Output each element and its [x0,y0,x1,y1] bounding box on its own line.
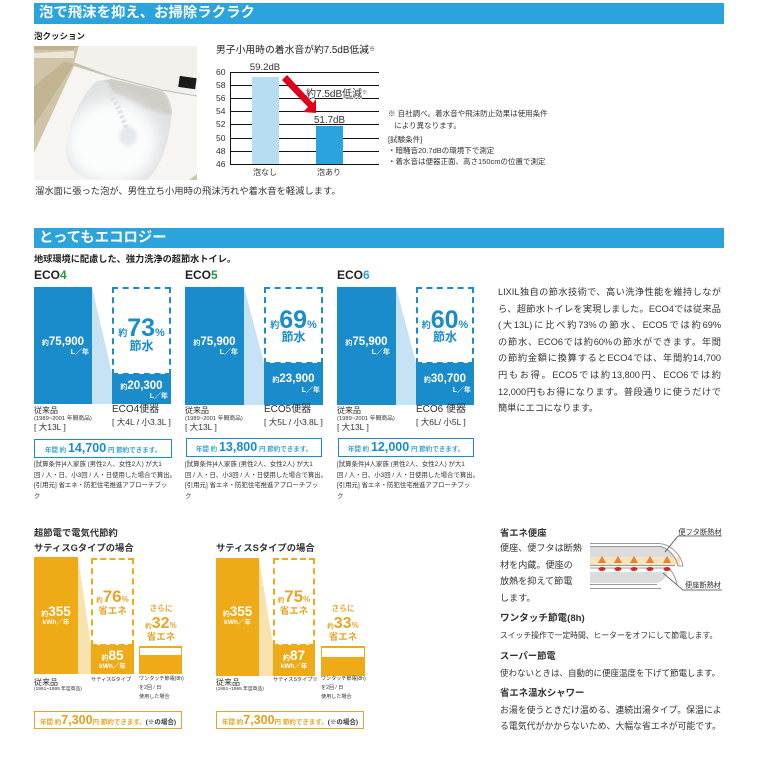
ECO5 panel: 約75,900 [193,336,236,348]
energy panel: type S: ワンタッチ節電(8h) [321,676,366,682]
ecology lead text: 地球環境に配慮した、強力洗浄の超節水トイレ。 [34,254,236,264]
electricity saving heading [34,528,134,553]
bar chart: noise reduction: 48 [216,146,226,156]
footnote and test conditions [388,109,548,130]
warm water shower text: 省エネ温水シャワー [500,687,584,698]
arrow: reduction [282,75,316,113]
energy panel: type S: 使用した場合 [321,694,352,700]
ECO5 panel: 約23,900 [272,373,315,385]
energy panel: type G: を2回 / 日 [139,685,161,691]
LIXIL water saving paragraph: 簡単にエコになります。 [498,403,598,413]
diagram: seat insulation: 便フタ断熱材 [678,528,722,536]
bar chart: noise reduction: ※ [362,90,367,96]
seat description: 材を内蔵。便座の [500,560,573,570]
energy panel: type S: を2回 / 日 [321,685,343,691]
bar chart: noise reduction: 約7.5dB低減 [306,89,362,100]
energy panel: type S: 約75% [278,587,310,606]
ECO5 panel: (1989~2001 年間商品) [185,416,243,422]
energy panel: type G: 約355 [41,604,71,619]
ECO5 panel: ク [185,493,191,500]
ECO5 panel: L／年 [220,349,238,356]
energy panel: type G: ワンタッチ節電(8h) [139,676,184,682]
energy panel: type G: 約76% [96,587,129,606]
ECO6 panel: 節水 [433,330,457,344]
bar chart: noise reduction: 50 [216,133,226,143]
warm water shower description: る電気代がかからないため、大幅な省エネが可能です。 [500,721,721,731]
energy panel: type G: サティスGタイプ [91,677,131,683]
ECO6 panel: ECO6 便器 [416,404,466,415]
ECO4 panel: ク [34,493,40,500]
bar chart: noise reduction: 60 [216,67,226,77]
energy panel: type S: 年間 約7,300円 節約できます。(※の場合) [222,713,358,727]
ECO6 panel: (1989~2001 年間商品) [337,416,395,422]
energy panel: type G: 年間 約7,300円 節約できます。(※の場合) [40,713,176,727]
ECO4 panel: L／年 [150,393,168,400]
photo: toilet bowl with foam [34,46,197,180]
super saving description: 使わないときは、自動的に便座温度を下げて節電します。 [500,668,720,678]
heading banner: foam [34,3,724,24]
warm water shower description: お湯を使うときだけ温める、連続出湯タイプ。保温によ [500,705,722,715]
ECO4 panel: 約73% [118,314,165,342]
ECO6 panel: 回 / 人・日、小3回 / 人・日使用した場合で算出。 [337,472,479,479]
ECO6 panel: [ 大6L/ 小5L ] [416,417,466,427]
foam description: 溜水面に張った泡が、男性立ち小用時の飛沫汚れや着水音を軽減します。 [35,186,341,196]
ECO5 panel: 回 / 人・日、小3回 / 人・日使用した場合で算出。 [185,472,327,479]
LIXIL water saving paragraph: 12,000円もお得になります。普段通りに使うだけで [498,387,721,397]
ECO5 panel: [引用元] 省エネ・防犯住宅推進アプローチブッ [185,482,318,489]
bar chart: noise reduction: 泡あり [317,167,341,177]
energy panel: type G: 従来品 [34,678,58,687]
test conditions: [試験条件] [388,135,422,144]
chart title: 男子小用時の着水音が約7.5dB低減※ [216,45,375,56]
energy panel: type G: kWh／年 [43,619,69,626]
ECO6 panel: L／年 [453,387,471,394]
ECO5 panel: 従来品 [185,406,209,415]
test conditions [388,135,546,166]
ECO4 panel: 従来品 [34,406,58,415]
ECO4 panel [34,268,176,500]
ECO5 panel: 約69% [270,306,317,334]
one-touch saving text: ワンタッチ節電(8h) [500,613,585,624]
ECO6 panel: 約75,900 [345,336,388,348]
bar: with foam [316,126,343,164]
bar chart: noise reduction: 56 [216,93,226,103]
seat description: 放熱を抑えて節電 [500,576,572,586]
ECO4 panel: L／年 [71,349,89,356]
LIXIL water saving paragraph: の節約金額に換算するとECO4では、年間約14,700 [498,353,721,363]
bar chart: noise reduction [216,62,379,177]
ECO6 panel: 約60% [422,306,468,334]
type S heading: サティスSタイプの場合 [216,543,315,553]
energy panel: type G [34,557,184,729]
energy panel: type S: 省エネ [329,632,357,643]
ECO5 panel: ECO5便器 [264,404,311,415]
energy panel: type G: 約85 [101,648,124,663]
energy panel: type G: 約32% [145,615,177,632]
electricity saving heading: サティスGタイプの場合 [34,543,134,553]
super saving text: スーパー節電 [500,651,556,661]
energy panel: type G: (1991~1995 年度商品) [34,687,82,692]
energy panel: type S: 従来品 [216,678,240,687]
energy panel: type S: (1991~1995 年度商品) [216,687,264,692]
ECO5 panel: 年間 約 13,800 円 節約できます。 [196,440,312,454]
ECO6 panel: ECO6 [337,268,370,282]
subheading: foam cushion: 泡クッション [34,31,85,41]
energy panel: type G: 省エネ [98,606,127,617]
ECO6 panel: [試算条件]4人家族 (男性2人、女性2人) が大1 [337,461,465,468]
LIXIL water saving paragraph: の節水、ECO6では約60%の節水ができます。年間 [498,337,721,347]
heading banner: ecology [34,228,724,248]
bar chart: noise reduction: 59.2dB [250,62,280,73]
bar chart: noise reduction: 泡なし [253,167,277,177]
energy panel: type G: 省エネ [147,632,175,643]
ECO4 panel: [試算条件]4人家族 (男性2人、女性2人) が大1 [34,461,162,468]
ECO5 panel: ECO5 [185,268,218,282]
LIXIL water saving paragraph: (大13L)に比べ約73%の節水、ECO5では約69% [498,320,721,330]
energy panel: type S: 約87 [283,648,305,663]
energy panel: type G: さらに [149,604,173,613]
energy panel: type S [216,558,366,729]
ECO4 panel: ECO4 [34,268,67,282]
energy panel: type S: 約355 [223,604,252,619]
diagram: seat insulation: 便座断熱材 [685,580,721,590]
ECO4 panel: (1989~2001 年間商品) [34,416,92,422]
ECO4 panel: [ 大13L ] [34,422,66,432]
ECO4 panel: ECO4便器 [112,404,159,415]
energy-saving seat text: 省エネ便座 [500,528,546,538]
electricity saving heading: 超節電で電気代節約 [34,528,118,538]
seat description [500,543,582,602]
warm water shower description [500,705,722,731]
test conditions: ・暗騒音20.7dBの環境下で測定 [388,146,494,155]
ECO4 panel: 約20,300 [120,380,163,392]
energy panel: type G: kWh／年 [99,663,126,670]
ECO5 panel: [ 大5L / 小3.8L ] [264,417,323,427]
bar chart: noise reduction: 54 [216,106,226,116]
bar chart: noise reduction: 58 [216,80,226,90]
ECO4 panel: 年間 約 14,700 円 節約できます。 [45,441,161,455]
bar chart: noise reduction: 52 [216,119,226,129]
LIXIL water saving paragraph: LIXIL独自の節水技術で、高い洗浄性能を維持しなが [498,287,721,297]
bar chart: noise reduction: 51.7dB [314,115,345,126]
ECO4 panel: 約75,900 [42,336,84,348]
energy panel: type S: 約33% [327,615,359,632]
bar: without foam [252,77,279,164]
heading banner: ecology: とってもエコロジー [39,230,167,246]
energy panel: type S: 省エネ [280,606,308,617]
energy panel: type S: kWh／年 [281,663,307,670]
footnote and test conditions: ※ 自社調べ。着水音や飛沫防止効果は使用条件 [388,109,548,118]
energy panel: type G: 使用した場合 [139,694,170,700]
ECO6 panel: 約30,700 [424,373,466,385]
LIXIL water saving paragraph: ら、超節水トイレを実現しました。ECO4では従来品 [498,304,721,314]
LIXIL water saving paragraph [498,287,721,413]
test conditions: ・着水音は便器正面、高さ150cmの位置で測定 [388,157,546,166]
ECO6 panel: 従来品 [337,406,361,415]
seat description: 便座、便フタは断熱 [500,543,582,553]
energy panel: type S: サティスSタイプ※ [273,677,318,683]
footnote and test conditions: により異なります。 [394,120,461,130]
diagram: seat insulation [590,528,722,590]
seat description: します。 [500,592,535,602]
ECO5 panel: L／年 [302,387,320,394]
ECO6 panel: [ 大13L ] [337,422,369,432]
ECO6 panel: L／年 [372,349,390,356]
ECO4 panel: 回 / 人・日、小3回 / 人・日使用した場合で算出。 [34,472,176,479]
ECO6 panel: 年間 約 12,000 円 節約できます。 [348,440,464,454]
bar chart: noise reduction: 46 [216,159,226,169]
ECO5 panel [185,268,327,500]
energy panel: type S: さらに [331,604,355,613]
one-touch description: スイッチ操作で一定時間、ヒーターをオフにして節電します。 [500,631,717,640]
heading banner: foam: 泡で飛沫を抑え、お掃除ラクラク [39,5,255,21]
ECO5 panel: [試算条件]4人家族 (男性2人、女性2人) が大1 [185,461,313,468]
ECO6 panel [337,268,479,500]
ECO4 panel: [引用元] 省エネ・防犯住宅推進アプローチブッ [34,482,167,489]
energy panel: type S: kWh／年 [224,619,251,626]
ECO5 panel: [ 大13L ] [185,422,217,432]
ECO5 panel: 節水 [281,330,306,344]
ECO4 panel: [ 大4L / 小3.3L ] [112,417,171,427]
ECO6 panel: [引用元] 省エネ・防犯住宅推進アプローチブッ [337,482,470,489]
ECO4 panel: 節水 [129,339,154,353]
LIXIL water saving paragraph: 円もお得。ECO5では約13,800円、ECO6では約 [498,370,721,380]
ECO6 panel: ク [337,493,343,500]
